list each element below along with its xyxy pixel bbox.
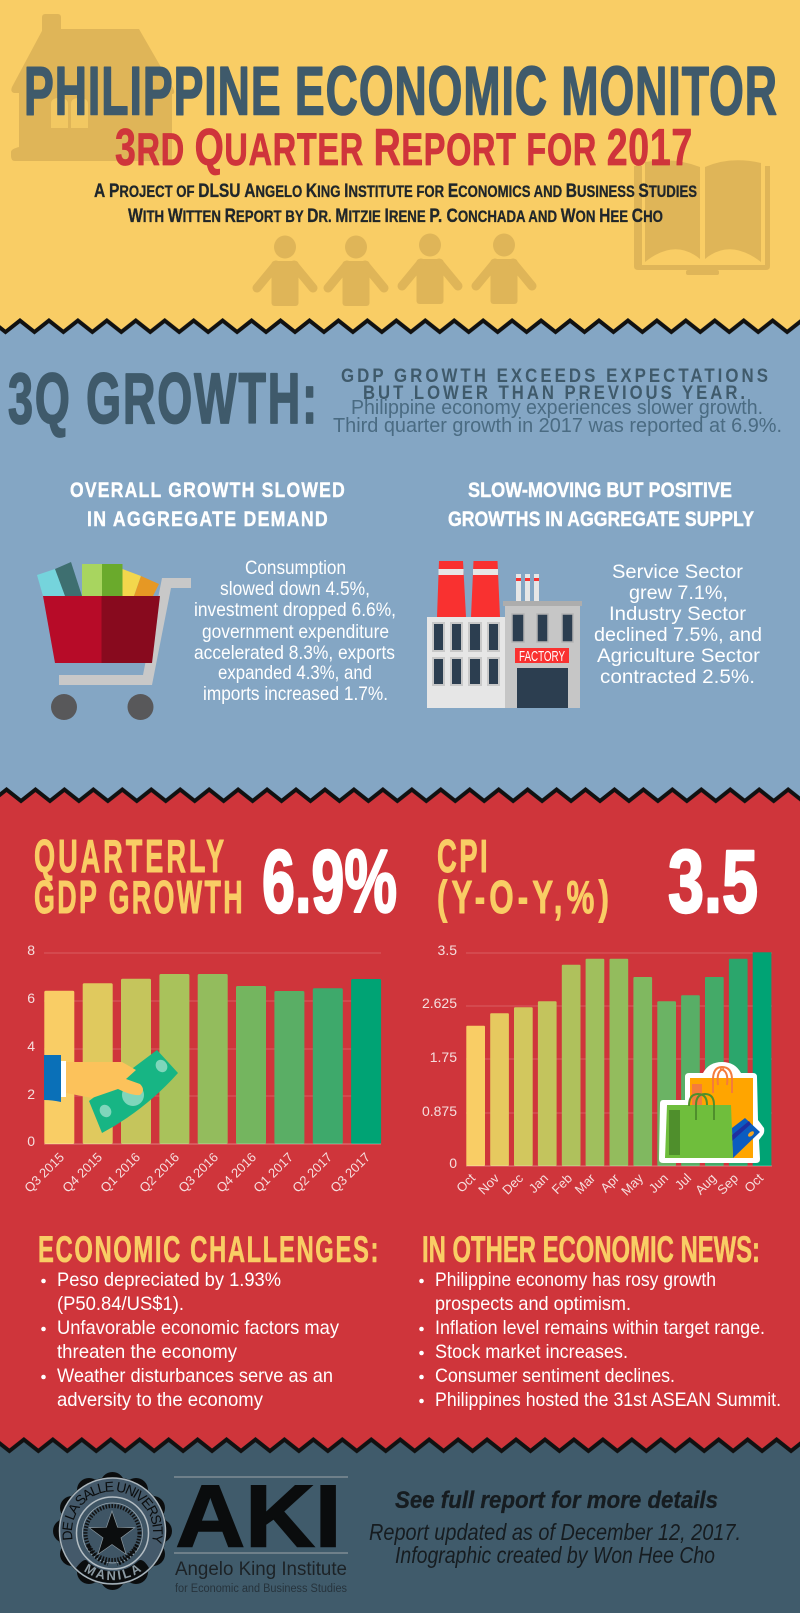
text: report date and credit: Report updated as of December 12, 2017. (369, 1519, 741, 1545)
icon: shopping bags (659, 1062, 764, 1163)
icon: open book (634, 160, 770, 275)
logo: AKI Angelo King Institute: AKI (176, 1466, 342, 1566)
bar chart: CPI year on year: 3.5 (438, 942, 457, 958)
bar chart: CPI year on year: Mar (572, 1170, 599, 1197)
author credit line: WITH WITTEN REPORT BY DR. MITZIE IRENE P. CONCHADA AND WON HEE CHO (128, 205, 663, 227)
bar chart: quarterly GDP growth (21, 942, 381, 1195)
stat: 6.9%: 6.9% (262, 831, 397, 931)
text: demand details: Consumption (245, 557, 346, 579)
bar chart: quarterly GDP growth: 8 (27, 942, 35, 958)
text: demand details (194, 557, 396, 705)
heading: aggregate supply: SLOW-MOVING BUT POSITIVE (468, 479, 732, 502)
bar chart: CPI year on year: Oct (453, 1170, 478, 1195)
bar chart: CPI year on year: 2.625 (422, 995, 457, 1011)
heading: CPI (437, 830, 613, 923)
logo: De La Salle University seal: MANILA (84, 1564, 142, 1580)
text: supply details (594, 561, 762, 688)
heading: aggregate demand: OVERALL GROWTH SLOWED (70, 479, 346, 502)
icon: factory: FACTORY (519, 648, 565, 665)
logo: De La Salle University seal (53, 1472, 172, 1590)
bar chart: quarterly GDP growth: Q1 2017 (250, 1150, 296, 1195)
bar chart: quarterly GDP growth: Q4 2016 (213, 1150, 259, 1195)
logo: AKI Angelo King Institute (174, 1466, 348, 1595)
heading: CPI: CPI (437, 830, 490, 882)
bar chart: CPI year on year: 0 (449, 1155, 457, 1171)
text: supply details: grew 7.1%, (629, 582, 728, 604)
list: economic challenges: Weather disturbances serve as an (57, 1365, 333, 1387)
text: growth summary: Philippine economy experiences slower growth. (351, 397, 763, 419)
icon: factory (427, 561, 582, 708)
text: supply details: Industry Sector (609, 603, 747, 625)
stat: 3.5: 3.5 (668, 831, 758, 931)
bar chart: quarterly GDP growth: 6 (27, 990, 35, 1006)
project credit line: A PROJECT OF DLSU ANGELO KING INSTITUTE FOR ECONOMICS AND BUSINESS STUDIES (94, 180, 697, 202)
icon: person 3 (402, 234, 458, 304)
bar chart: CPI year on year: Feb (549, 1171, 575, 1197)
panel: footer (0, 1455, 800, 1613)
bar chart: CPI year on year: Jun (646, 1171, 671, 1196)
list: other economic news (419, 1269, 781, 1411)
heading: economic challenges: ECONOMIC CHALLENGES: (38, 1229, 380, 1270)
bar chart: CPI year on year: 0.875 (422, 1103, 457, 1119)
bar chart: CPI year on year: May (618, 1170, 646, 1198)
heading: 3Q growth: 3Q GROWTH: (8, 360, 319, 439)
text: supply details: declined 7.5%, and (594, 624, 762, 646)
list: other economic news: prospects and optimism. (435, 1293, 631, 1315)
icon: house (11, 14, 174, 161)
text: demand details: accelerated 8.3%, exports (194, 642, 395, 664)
list: economic challenges: threaten the economy (57, 1341, 237, 1363)
heading: quarterly GDP growth (34, 830, 245, 923)
bar chart: CPI year on year: Jan (526, 1171, 551, 1196)
text: report date and credit: Infographic created by Won Hee Cho (395, 1542, 715, 1568)
icon: shopping cart (37, 562, 191, 720)
bar chart: quarterly GDP growth: Q3 2017 (327, 1150, 373, 1195)
subtitle: 3RD QUARTER REPORT FOR 2017 (115, 119, 693, 177)
bar chart: CPI year on year (422, 942, 772, 1198)
icon: person 1 (257, 236, 313, 306)
list: economic challenges: Peso depreciated by 1.93% (57, 1269, 281, 1291)
bar chart: CPI year on year: Aug (692, 1171, 719, 1197)
list: other economic news: Stock market increases. (435, 1341, 628, 1363)
panel: indicators (0, 805, 800, 1455)
bar chart: quarterly GDP growth: Q3 2015 (21, 1150, 67, 1195)
panel: 3Q growth (0, 336, 800, 805)
icon: hand holding money (44, 1050, 178, 1133)
list: other economic news: Consumer sentiment declines. (435, 1365, 675, 1387)
bar chart: quarterly GDP growth: Q3 2016 (175, 1150, 221, 1195)
bar chart: CPI year on year: Nov (475, 1170, 502, 1197)
bar chart: quarterly GDP growth: Q1 2016 (97, 1150, 143, 1195)
heading: CPI: (Y-O-Y,%) (437, 871, 613, 923)
text: see full report: See full report for more details (395, 1487, 718, 1514)
heading: aggregate supply (448, 479, 754, 531)
icon: person 2 (328, 236, 384, 306)
logo: AKI Angelo King Institute: Angelo King Institute (175, 1559, 347, 1580)
list: other economic news: Philippine economy has rosy growth (435, 1269, 716, 1291)
text: supply details: Service Sector (612, 561, 744, 583)
bar chart: quarterly GDP growth: 0 (27, 1133, 35, 1149)
logo: AKI Angelo King Institute: for Economic and Business Studies (175, 1583, 347, 1595)
icon: person 4 (476, 234, 532, 304)
text: supply details: Agriculture Sector (597, 645, 761, 667)
bar chart: quarterly GDP growth: Q2 2016 (136, 1150, 182, 1195)
heading: quarterly GDP growth: GDP GROWTH (34, 871, 245, 923)
list: economic challenges: Unfavorable economic factors may (57, 1317, 339, 1339)
bar chart: CPI year on year: 1.75 (430, 1049, 457, 1065)
text: report date and credit (369, 1519, 741, 1568)
text: demand details: imports increased 1.7%. (203, 683, 388, 705)
bar chart: CPI year on year: Oct (741, 1170, 766, 1195)
text: growth summary (333, 365, 782, 437)
text: demand details: expanded 4.3%, and (218, 662, 372, 684)
text: demand details: investment dropped 6.6%, (194, 599, 396, 621)
text: demand details: slowed down 4.5%, (220, 578, 370, 600)
bar chart: quarterly GDP growth: 4 (27, 1038, 35, 1054)
bar chart: quarterly GDP growth: Q2 2017 (289, 1150, 335, 1195)
bar chart: CPI year on year: Dec (499, 1170, 526, 1197)
bar chart: CPI year on year: Apr (597, 1170, 623, 1195)
panel: header (0, 0, 800, 340)
list: economic challenges (41, 1269, 339, 1411)
list: economic challenges: adversity to the economy (57, 1389, 263, 1411)
text: supply details: contracted 2.5%. (600, 666, 755, 688)
logo: De La Salle University seal: DE LA SALLE UNIVERSITY (62, 1482, 163, 1544)
bar chart: quarterly GDP growth: 2 (27, 1086, 35, 1102)
text: growth summary: Third quarter growth in 2017 was reported at 6.9%. (333, 415, 782, 437)
list: economic challenges: (P50.84/US$1). (57, 1293, 184, 1315)
bar chart: CPI year on year: Jul (672, 1170, 694, 1193)
heading: aggregate demand (70, 479, 346, 531)
bar chart: quarterly GDP growth: Q4 2015 (59, 1150, 105, 1195)
bar chart: CPI year on year: Sep (714, 1171, 741, 1197)
text: growth summary: BUT LOWER THAN PREVIOUS YEAR. (363, 382, 748, 404)
heading: quarterly GDP growth: QUARTERLY (34, 830, 227, 882)
heading: aggregate demand: IN AGGREGATE DEMAND (87, 508, 329, 531)
list: other economic news: Inflation level remains within target range. (435, 1317, 765, 1339)
text: demand details: government expenditure (202, 621, 389, 643)
